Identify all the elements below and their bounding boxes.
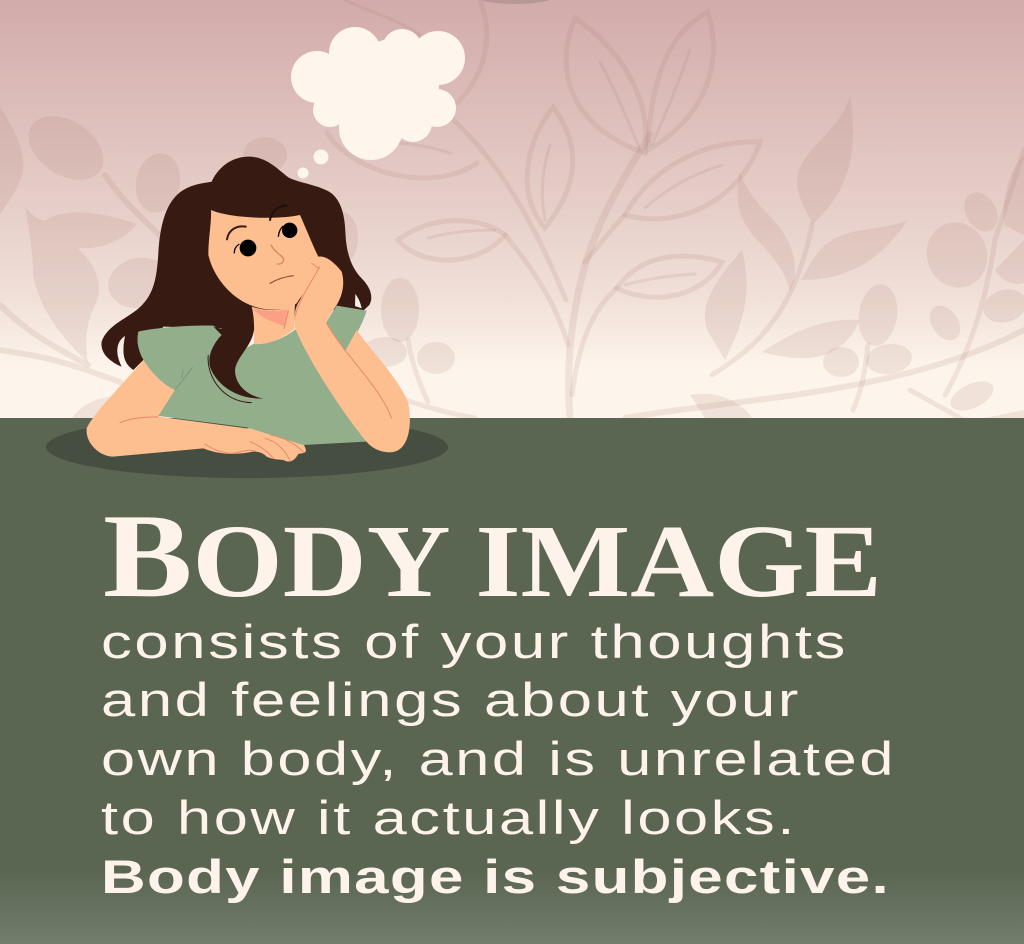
plant stems at right [625,150,1024,418]
face [208,210,318,310]
thought bubble [291,27,465,178]
table shadow under woman [46,416,448,478]
background peek in hair [355,294,362,308]
cloud [291,27,465,160]
body paragraph: Body image is subjective. [101,850,890,903]
background: pink sky gradient [0,0,1024,420]
sleeve fold [175,367,193,390]
hair crease line [208,355,252,403]
green shirt [137,306,367,445]
top edge shape [475,0,555,4]
nose and mouth [270,245,293,283]
eyes [234,223,297,256]
dark green table panel [0,418,1024,944]
body paragraph: and feelings about your [101,673,801,726]
hair strand over shirt [209,327,263,398]
title: BODY IMAGE [103,489,882,622]
right arm and hand [294,256,410,452]
body paragraph: consists of your thoughts [101,615,848,668]
filled plant at left [0,103,455,418]
left arm [87,358,306,462]
filled plant at right [690,95,1024,418]
body paragraph: own body, and is unrelated [101,732,896,785]
neck [252,303,295,344]
thought dot large [314,150,328,164]
woman thinking, head resting on hand [87,157,410,462]
thought dot small [298,168,308,178]
body paragraph: to how it actually looks. [101,791,797,844]
eyebrows [227,206,287,239]
arm and hand creases [120,263,392,461]
neck shadow [253,308,289,326]
hair [101,157,371,398]
plant stems at left [0,175,475,418]
body paragraph [101,615,896,903]
decorative plants [0,0,1024,418]
outlined plant at centre [327,0,760,418]
